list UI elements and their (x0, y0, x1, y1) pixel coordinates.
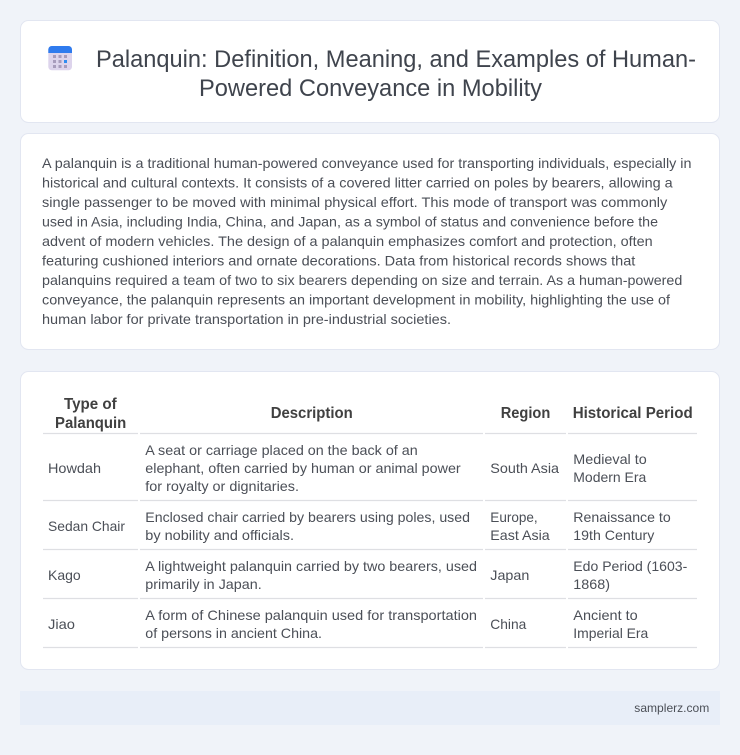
text block: description: used in Asia, including India, China, and Japan, as a symbol of status and convenience before the (42, 214, 658, 230)
table row: Sedan Chair: Sedan Chair (48, 518, 125, 534)
table row: Sedan Chair (48, 509, 671, 543)
table row: Kago: Japan (490, 567, 529, 583)
table row: Kago: Edo Period (1603- (573, 558, 688, 574)
table row: Kago (48, 558, 688, 592)
table header row: Description (271, 405, 353, 422)
table row: Kago: primarily in Japan. (145, 576, 262, 592)
footer: samplerz.com (634, 701, 709, 715)
table row: Jiao: A form of Chinese palanquin used for transportation (145, 607, 477, 623)
table row: Jiao: Jiao (48, 616, 75, 632)
panel: title card (20, 20, 720, 122)
table row: Sedan Chair: Europe, (490, 509, 538, 525)
table row: Jiao: Imperial Era (573, 625, 649, 641)
table row: Howdah: Medieval to (573, 451, 647, 467)
text block: description: advent of modern vehicles. The design of a palanquin emphasizes comfort and protection, often (42, 233, 653, 249)
text block: description: historical and cultural contexts. It consists of a covered litter carried on poles by bearers, allowing a (42, 174, 673, 190)
table header row (55, 396, 693, 432)
title (96, 46, 696, 102)
table row: Kago: 1868) (573, 576, 610, 592)
table row: Kago: Kago (48, 567, 81, 583)
table row: Jiao: Ancient to (573, 607, 638, 623)
table header row: Historical Period (573, 405, 693, 422)
text block: description: single passenger to be moved with minimal physical effort. This mode of transport was commonly (42, 194, 667, 210)
panel: description card (20, 134, 720, 350)
table row: Sedan Chair: 19th Century (573, 527, 654, 543)
table row: Kago: A lightweight palanquin carried by two bearers, used (145, 558, 477, 574)
table row: Howdah: elephant, often carried by human or animal power (145, 460, 461, 476)
table row: Howdah: Modern Era (573, 469, 647, 485)
text block: description: conveyance, the palanquin represents an important development in mobility, highlighting the use of (42, 292, 670, 308)
panel: table card (20, 372, 720, 670)
title: Powered Conveyance in Mobility (199, 75, 542, 102)
table row: Howdah (48, 442, 647, 494)
table row: Jiao (48, 607, 649, 641)
text block: description: palanquins required a team of two to six bearers depending on size and terrain. As a human-powered (42, 272, 682, 288)
text block: description: featuring cushioned interiors and ornate decorations. Data from historical records shows that (42, 252, 635, 268)
table row: Jiao: China (490, 616, 526, 632)
table row: Howdah: South Asia (490, 460, 559, 476)
table header row: Type of (64, 396, 117, 413)
footer (20, 691, 720, 725)
table header row: Palanquin (55, 415, 126, 432)
table row: Howdah: A seat or carriage placed on the back of an (145, 442, 418, 458)
icon: calendar (48, 46, 72, 70)
table row: Sedan Chair: Enclosed chair carried by bearers using poles, used (145, 509, 470, 525)
table row: Sedan Chair: East Asia (490, 527, 550, 543)
table row: Howdah: for royalty or dignitaries. (145, 478, 299, 494)
table row: Sedan Chair: Renaissance to (573, 509, 671, 525)
text block: description: human labor for private transportation in pre-industrial societies. (42, 311, 451, 327)
table row: Sedan Chair: by nobility and officials. (145, 527, 294, 543)
table row: Jiao: of persons in ancient China. (145, 625, 322, 641)
table header row: Region (501, 405, 550, 422)
title: Palanquin: Definition, Meaning, and Examples of Human- (96, 46, 696, 73)
text block: description: A palanquin is a traditional human-powered conveyance used for transporting individuals, especially in (42, 155, 691, 171)
table row: Howdah: Howdah (48, 460, 101, 476)
text block: description (42, 155, 691, 327)
